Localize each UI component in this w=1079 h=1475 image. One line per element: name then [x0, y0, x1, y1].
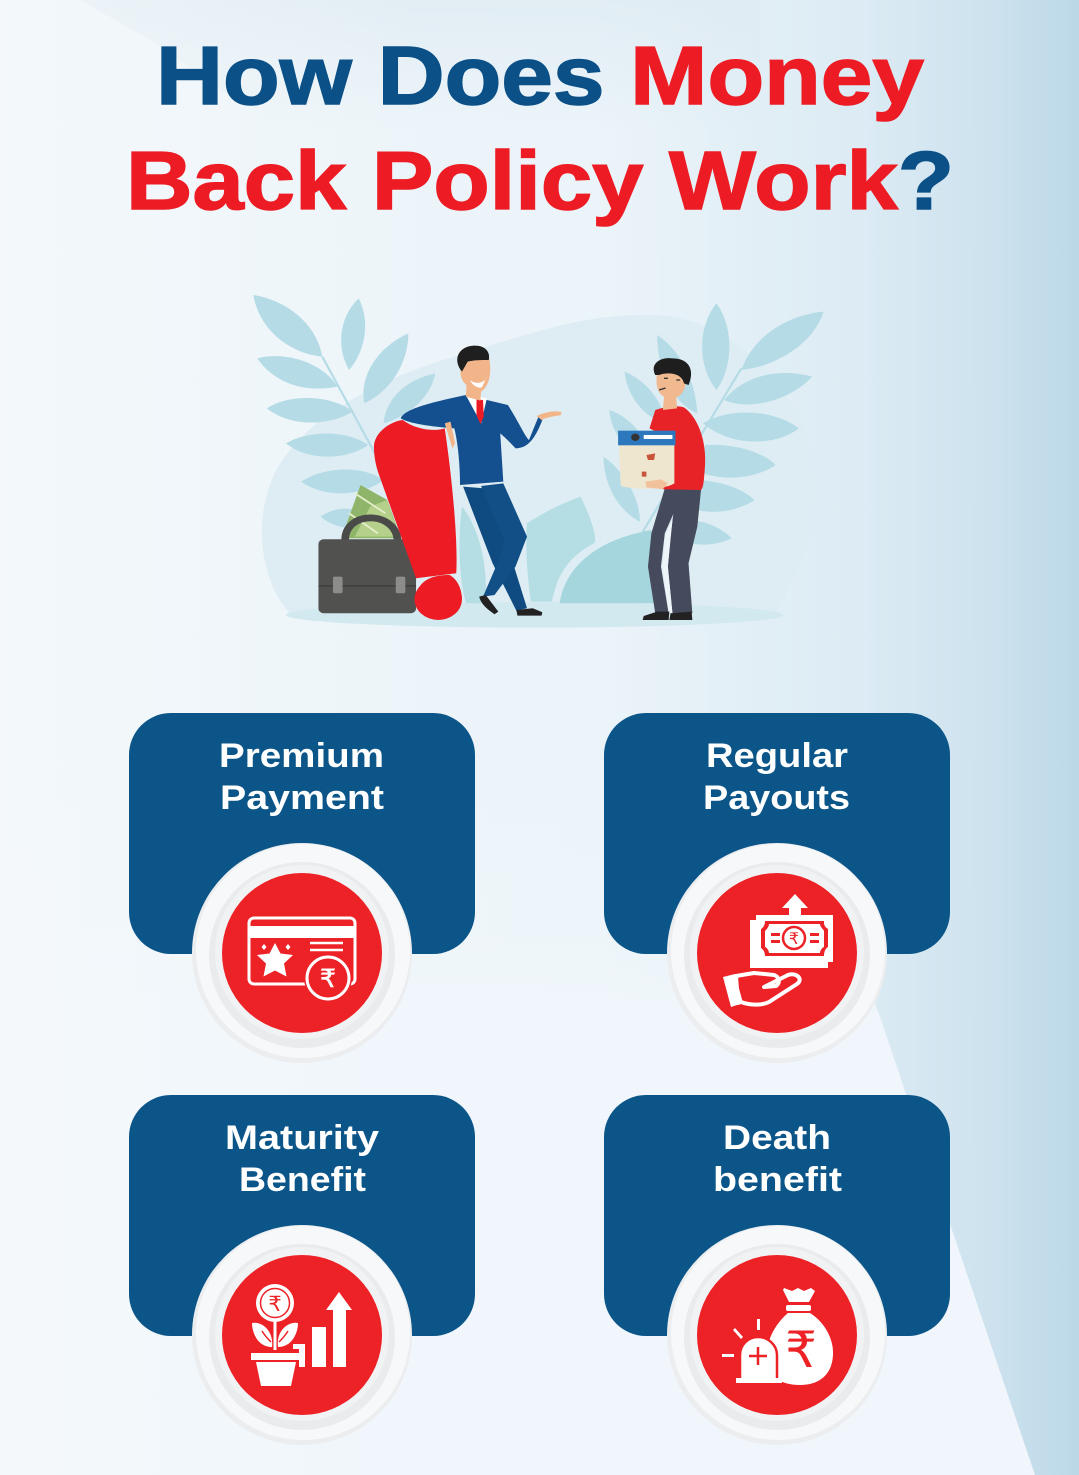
icon: hand with banknote and up arrow: [723, 894, 833, 1007]
badge ring: [192, 1225, 412, 1445]
heading: maturity benefit: Benefit: [239, 1161, 366, 1199]
heading: premium payment: [219, 737, 384, 817]
shirt and tie: [466, 395, 487, 423]
heading: premium payment: Premium: [219, 737, 384, 775]
businessman: [401, 346, 561, 616]
illustration: agent and customer: [253, 295, 824, 628]
hands: [537, 411, 561, 420]
icon: tombstone and money bag: ₹: [785, 1322, 817, 1378]
heading: regular payouts: Payouts: [703, 779, 850, 817]
icon: credit card with rupee coin: [249, 918, 355, 1002]
panel: death benefit: [604, 1095, 950, 1445]
panel: regular payouts: [604, 713, 950, 1063]
face: [460, 357, 490, 401]
ground shadow: [286, 602, 783, 628]
sweater: [649, 406, 705, 490]
trousers: [648, 488, 684, 613]
customer: [618, 358, 705, 620]
heading: regular payouts: Regular: [706, 737, 848, 775]
face: [656, 372, 686, 410]
left plant: [253, 295, 435, 528]
badge ring: [667, 1225, 887, 1445]
heading: death benefit: [713, 1119, 842, 1199]
briefcase: [318, 518, 416, 613]
icon: plant pot with rupee and growth chart: [251, 1284, 352, 1386]
heading: death benefit: benefit: [713, 1161, 842, 1199]
title: [126, 29, 954, 227]
heading: maturity benefit: [225, 1119, 379, 1199]
icon: credit card with rupee coin: ₹: [320, 965, 336, 993]
right plant: [604, 303, 824, 545]
money in briefcase: [341, 485, 401, 538]
red exclamation mark: [374, 420, 462, 620]
foreground leaves: [459, 497, 661, 603]
icon: hand with banknote and up arrow: ₹: [789, 931, 799, 948]
badge ring: [667, 843, 887, 1063]
icon: tombstone and money bag: [722, 1288, 833, 1385]
shoes: [479, 595, 542, 616]
hand: [646, 479, 668, 489]
folder stack: [619, 445, 674, 489]
badge ring: [192, 843, 412, 1063]
title: Back Policy Work ?: [126, 134, 954, 227]
title: How Does Money: [156, 29, 924, 122]
heading: regular payouts: [703, 737, 850, 817]
heading: death benefit: Death: [723, 1119, 831, 1157]
background blob: [262, 315, 814, 613]
icon: plant pot with rupee and growth chart: ₹: [268, 1293, 282, 1316]
panel: maturity benefit: [129, 1095, 475, 1445]
trousers: [463, 487, 527, 611]
panel: premium payment: [129, 713, 475, 1063]
heading: maturity benefit: Maturity: [225, 1119, 379, 1157]
shoes: [643, 612, 692, 620]
jacket: [401, 395, 542, 485]
hair: [457, 346, 489, 372]
heading: premium payment: Payment: [220, 779, 384, 817]
hair: [654, 358, 691, 385]
